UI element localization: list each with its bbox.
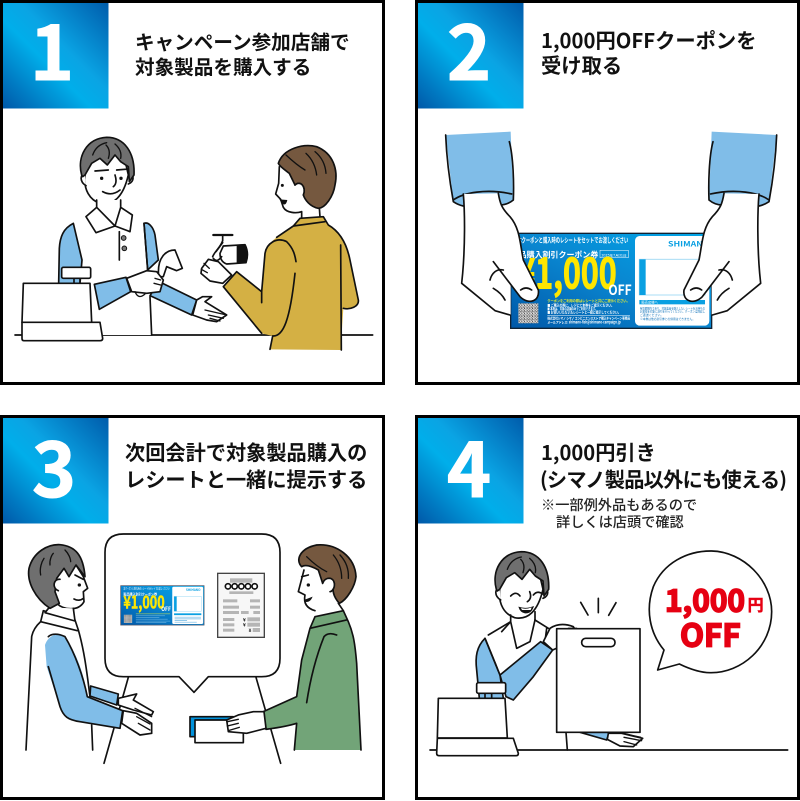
spinning reel (201, 235, 247, 283)
receipt: ¥ (243, 623, 246, 629)
coupon: ¥1,000 (517, 240, 617, 300)
coupon: ■ 本券は、対象の店舗のみでご利用できます。 (547, 306, 597, 312)
coupon: OFF (608, 280, 632, 300)
mini coupon: SHIMANO (186, 588, 201, 592)
mini coupon: 製品購入割引クーポン券 (123, 592, 158, 597)
step 3 heading: 次回会計で対象製品購入の (125, 437, 367, 466)
step 4 note: ※一部例外品もあるので (541, 495, 697, 515)
step 1 heading (135, 26, 350, 80)
coupon: 本クーポンと購入時のレシートをセットでお渡しください (517, 235, 629, 245)
coupon: ■ ご購入の際に、レジにて本券をご提示ください。 (547, 302, 614, 308)
panel 3: present coupon and receipt (2, 410, 384, 798)
step 3 heading (125, 437, 367, 493)
mini coupon (121, 586, 204, 625)
step 2 number badge (418, 0, 524, 108)
step 4 number badge: 4 (447, 410, 491, 519)
clerk (59, 137, 227, 335)
right hand and sleeve (684, 132, 777, 315)
coupon: ■ お使いいただいたレシートと一緒に提示してください。 (547, 310, 621, 316)
illustration: customer presents to clerk (26, 534, 361, 763)
speech bubble: 1000 yen off: OFF (680, 612, 741, 657)
shopping bag (557, 629, 643, 747)
coupon: ご返送ください。 (640, 312, 663, 317)
coupon: 2025年7月31日 (601, 253, 627, 258)
receipt: ¥ (243, 617, 246, 623)
cash register (437, 683, 518, 756)
mini coupon: 本クーポンと購入時のレシートをセットでお渡しください (123, 587, 170, 591)
step 3 heading: レシートと一緒に提示する (125, 464, 367, 493)
panel 1: purchase at store (2, 0, 384, 384)
coupon: 有効期限内であり、対象製品を購入したレシートをお持ちの (640, 305, 705, 310)
speech bubble: 1000 yen off: 1,000 (665, 577, 745, 621)
step 3 number badge (3, 410, 108, 524)
mini coupon: ¥1,000 (123, 588, 165, 613)
receipt: ¥ (249, 628, 252, 634)
panel 4: 1000 yen off (416, 410, 798, 798)
coupon: ※本券は他の割引券との併用はできません。 (640, 316, 695, 321)
step 4 heading: 1,000円引き (541, 437, 656, 466)
step 4 number badge (418, 410, 524, 524)
speech bubble: 1000 yen off: 円 (748, 592, 764, 616)
coupon: 販売店様へ (641, 300, 659, 305)
step 3 number badge: 3 (32, 410, 76, 519)
left person: clerk (26, 545, 153, 750)
step 1 number badge (3, 0, 108, 108)
step 2 heading: 1,000円OFFクーポンを (541, 24, 756, 54)
step 2 heading: 受け取る (541, 49, 622, 79)
coupon (511, 233, 712, 328)
right person: customer with coupon and receipt (190, 545, 361, 750)
coupon: クーポンをご利用の際はレシートと共にご提示ください。 (547, 298, 630, 304)
receipt (218, 573, 264, 637)
illustration: happy clerk with bag (430, 551, 788, 756)
illustration: clerk and customer at counter (15, 137, 373, 350)
step 4 heading: (シマノ製品以外にも使える) (540, 464, 787, 493)
panel 2: receive coupon (416, 0, 798, 384)
emphasis rays (581, 598, 616, 615)
illustration: hands holding coupon (446, 132, 777, 328)
step 4 note (541, 495, 697, 532)
left hand and sleeve (446, 132, 538, 315)
coupon: お客様を対象に割引を行ってください。クーポンは回収し (640, 309, 705, 314)
cash register (22, 267, 103, 341)
step 4 note: 詳しくは店頭で確認 (556, 512, 684, 532)
step 1 heading: キャンペーン参加店舗で (135, 26, 350, 55)
coupon: メールアドレス: shimano-fish@shimano-campaign.jp (547, 320, 621, 326)
coupon: 株式会社シマノ シマノ コンビニエンスストア購入キャンペーン事務局 (547, 316, 630, 322)
speech bubble: 1000 yen off (649, 551, 772, 673)
step 4 heading (540, 437, 787, 493)
coupon: SHIMANO (668, 240, 710, 250)
speech bubble (105, 534, 280, 692)
step 1 heading: 対象製品を購入する (135, 51, 311, 80)
step 2 heading (541, 24, 756, 79)
clerk (476, 552, 577, 750)
coupon: 製品購入割引クーポン券 (511, 249, 598, 260)
customer (223, 146, 358, 350)
mini coupon: OFF (161, 604, 171, 613)
